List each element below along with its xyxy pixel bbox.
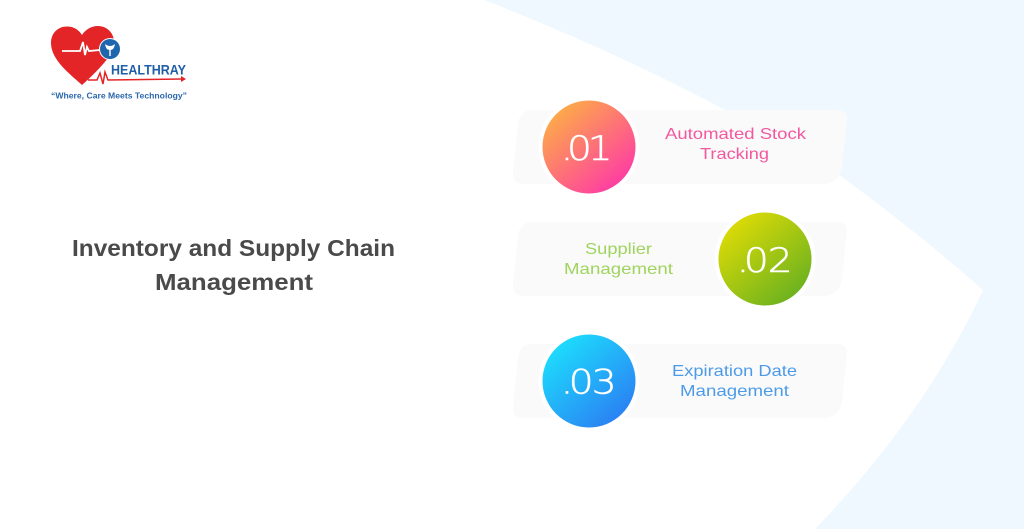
- panel: 02 supplier management: [513, 208, 847, 310]
- label: Management: [680, 383, 790, 400]
- number badge 03: .03: [561, 362, 617, 402]
- number badge 02: [714, 208, 816, 310]
- label: [672, 363, 797, 400]
- number badge 01: [538, 96, 640, 198]
- title: Management: [155, 269, 313, 295]
- number badge 01: .01: [561, 128, 613, 168]
- icon: blue medical badge: [99, 38, 121, 60]
- card background: [513, 110, 847, 184]
- label: Expiration Date: [672, 363, 797, 380]
- icon: white pulse line: [62, 42, 100, 55]
- title: [72, 235, 395, 295]
- card background: [513, 222, 847, 296]
- logo wordmark: HEALTHRAY: [111, 62, 187, 78]
- card background: [513, 344, 847, 418]
- icon: red pulse arrow: [88, 72, 186, 84]
- label: Supplier: [585, 241, 653, 258]
- label: Automated Stock: [665, 126, 807, 143]
- label: Management: [564, 261, 674, 278]
- background: light blue arrow-shaped panel: [484, 0, 1024, 529]
- logo: Healthray: [51, 26, 187, 100]
- number badge 02: .02: [737, 240, 793, 280]
- label: [564, 241, 674, 278]
- panel: 01 automated stock tracking: [513, 96, 847, 198]
- logo tagline: “Where, Care Meets Technology”: [51, 90, 187, 100]
- label: [665, 126, 807, 163]
- label: Tracking: [700, 146, 769, 163]
- number badge 03: [538, 330, 640, 432]
- title: Inventory and Supply Chain: [72, 235, 395, 261]
- icon: red heart: [51, 26, 114, 85]
- panel: 03 expiration date management: [513, 330, 847, 432]
